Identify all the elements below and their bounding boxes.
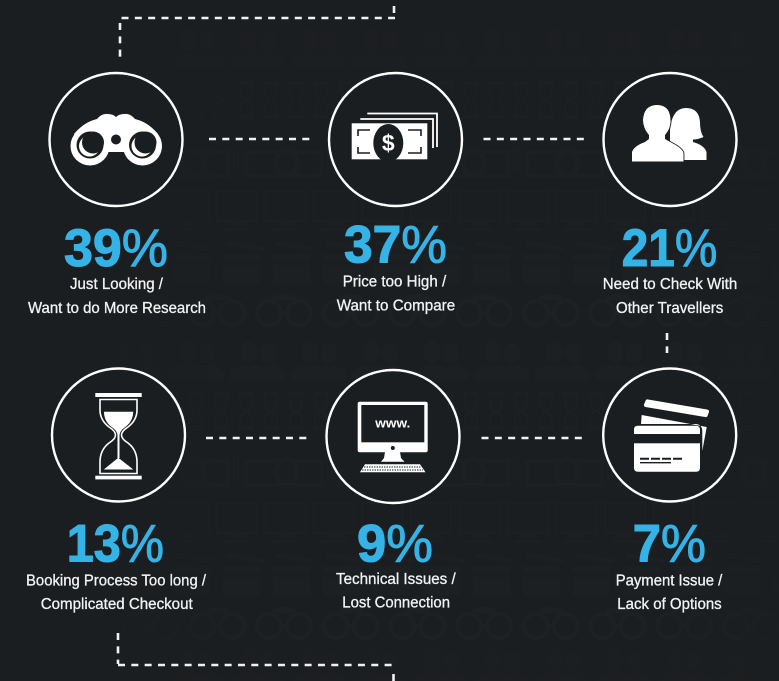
label: booking process: Booking Process Too long / [26, 573, 207, 590]
label: price too high: Price too High / [343, 274, 447, 291]
label: technical issues: Technical Issues / [336, 571, 456, 588]
icon: binoculars [50, 73, 182, 206]
percentage 13%: 13% [67, 515, 164, 574]
label: just looking: Want to do More Research [28, 300, 206, 317]
dashed connector: monitor to cards [482, 437, 582, 439]
label: just looking: Just Looking / [70, 276, 164, 293]
label: booking process [26, 573, 207, 613]
label: technical issues: Lost Connection [342, 595, 450, 612]
label: need to check [603, 276, 737, 317]
percentage 21%: 21% [622, 219, 717, 278]
label: price too high: Want to Compare [337, 298, 455, 315]
dashed connector: people to cards [666, 333, 668, 353]
label: technical issues [336, 571, 456, 612]
panel: need to check [603, 73, 737, 317]
panel: just looking [28, 73, 206, 317]
label: booking process: Complicated Checkout [41, 596, 193, 613]
label: payment issue [616, 573, 723, 613]
panel: technical issues [326, 370, 460, 612]
percentage 7%: 7% [633, 515, 706, 574]
label: payment issue: Lack of Options [617, 596, 722, 613]
dashed connector: money to people [484, 138, 584, 140]
dashed connector: binoculars to money [209, 138, 310, 140]
icon: credit cards [603, 368, 736, 502]
label: need to check: Need to Check With [603, 276, 737, 293]
panel: price too high [329, 73, 462, 315]
icon: people [604, 73, 736, 206]
icon: monitor [326, 370, 460, 503]
panel: booking process [26, 368, 207, 613]
dashed connector: bottom [118, 633, 395, 681]
dashed connector: top [120, 6, 395, 57]
label: need to check: Other Travellers [616, 300, 724, 317]
label: price too high [337, 274, 455, 315]
icon: money: $ [382, 130, 395, 156]
label: payment issue: Payment Issue / [616, 573, 723, 590]
panel: payment issue [603, 368, 736, 613]
icon: monitor: www. [374, 416, 410, 430]
icon: money [329, 73, 462, 206]
percentage 37%: 37% [344, 216, 447, 275]
percentage 9%: 9% [357, 515, 433, 574]
percentage 39%: 39% [64, 219, 168, 278]
dashed connector: hourglass to monitor [206, 437, 307, 439]
label: just looking [28, 276, 206, 317]
icon: hourglass [52, 368, 185, 502]
